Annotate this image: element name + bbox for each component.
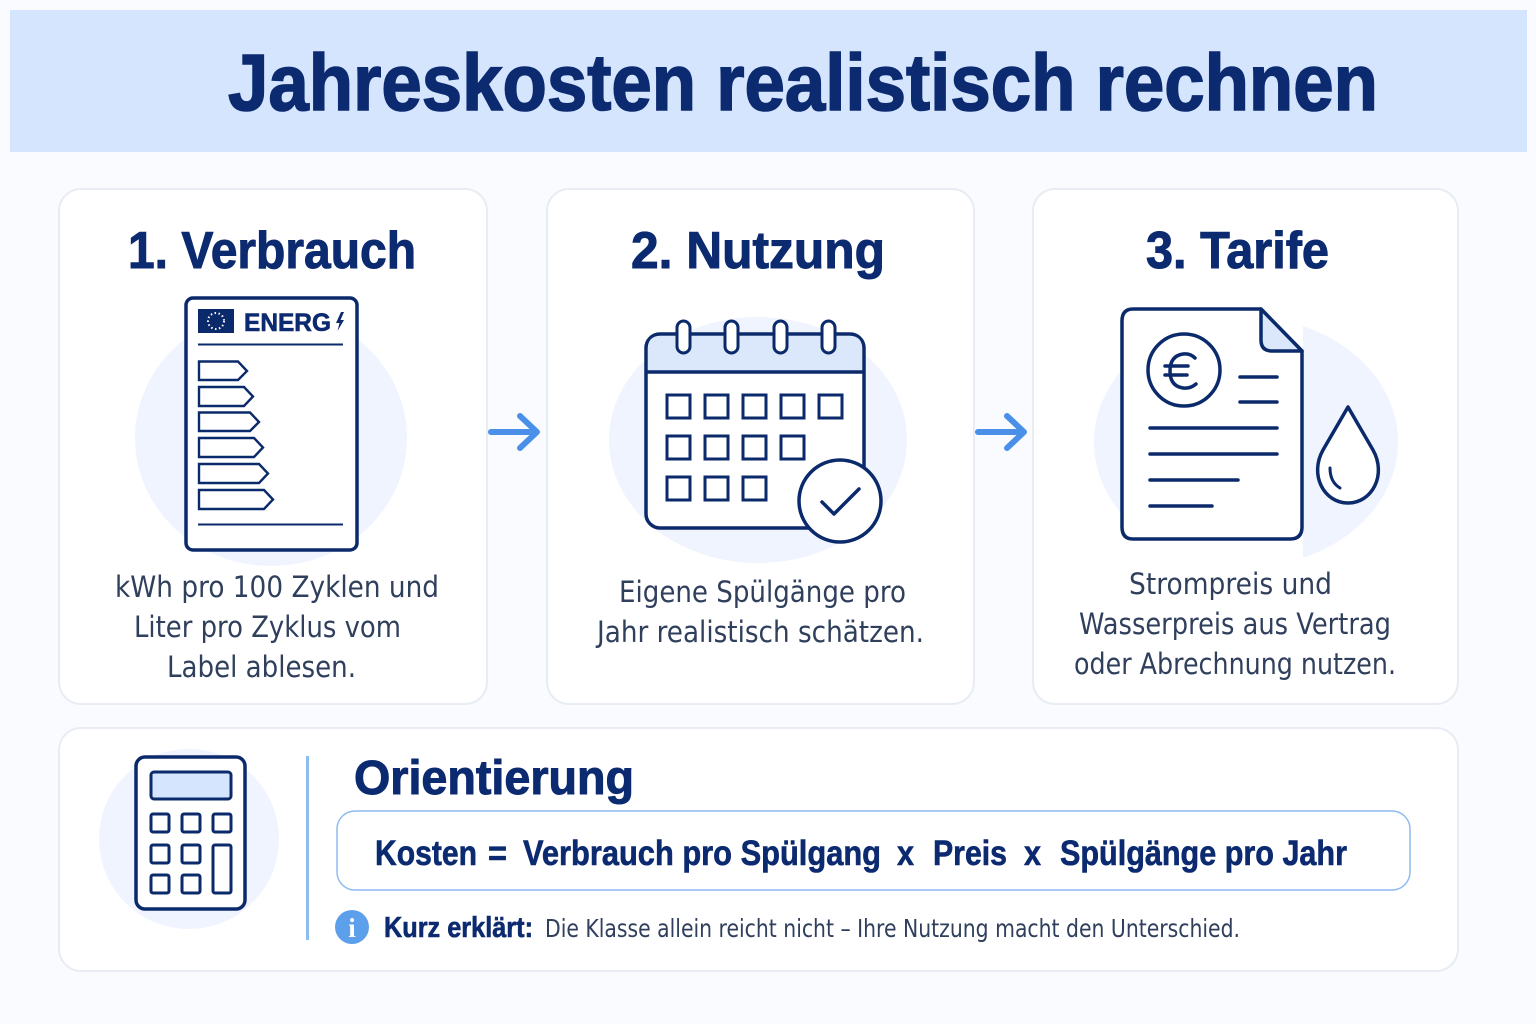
text: Nutzung description: Eigene Spülgänge pro [619,575,906,609]
formula box: Spülgänge pro Jahr [1060,834,1347,873]
text: Tarife description: Wasserpreis aus Vertrag [1079,607,1391,641]
icon: energy label: ENERG [244,309,331,337]
title banner: Jahreskosten realistisch rechnen [228,38,1378,127]
text: Verbrauch description [115,570,439,684]
formula box: x [897,834,914,873]
formula box: = [488,834,507,873]
formula box: Kosten [375,834,477,873]
icon: calculator [99,749,279,929]
note: Kurz erklärt: Kurz erklärt: [384,912,533,944]
note: Kurz erklärt [384,912,1240,944]
text: Tarife description: Strompreis und [1129,567,1332,601]
text: Tarife description [1074,567,1396,681]
text: Verbrauch description: Liter pro Zyklus vom [134,610,401,644]
text: Verbrauch description: kWh pro 100 Zyklen und [115,570,439,604]
formula box: Preis [933,834,1007,873]
formula box [337,811,1410,890]
panel: Orientierung [59,728,1458,971]
panel: Tarife [1033,189,1458,704]
heading: 3. Tarife: 3. Tarife [1146,222,1329,280]
heading: 2. Nutzung: 2. Nutzung [631,222,885,280]
heading: Orientierung: Orientierung [354,752,634,805]
text: Nutzung description [595,575,924,649]
text: Tarife description: oder Abrechnung nutzen. [1074,647,1396,681]
note: Kurz erklärt: Die Klasse allein reicht nicht – Ihre Nutzung macht den Unterschied. [545,914,1240,943]
icon: info [335,910,369,944]
panel: Nutzung [547,189,974,704]
formula box: Verbrauch pro Spülgang [523,834,881,873]
icon: calendar with check [609,317,907,563]
icon: energy label [135,298,407,566]
icon: info: i [348,913,356,943]
text: Verbrauch description: Label ablesen. [167,650,356,684]
heading: 1. Verbrauch: 1. Verbrauch [128,222,416,280]
title banner [10,10,1527,152]
arrow: step 1 to 2 [491,416,537,448]
icon: invoice and water drop [1094,300,1398,570]
text: Nutzung description: Jahr realistisch schätzen. [595,615,924,649]
arrow: step 2 to 3 [978,416,1024,448]
panel: Verbrauch [59,189,487,704]
formula box: x [1024,834,1041,873]
